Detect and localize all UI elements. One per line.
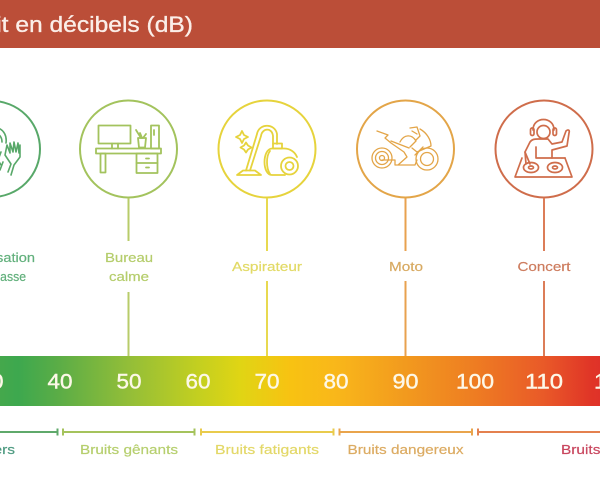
scale numbers: 70	[254, 370, 280, 394]
label: calme: calme	[109, 269, 149, 284]
decibel scale bar	[0, 356, 600, 406]
scale numbers: 110	[525, 370, 563, 394]
scale numbers: 90	[392, 370, 418, 394]
scale numbers: 50	[116, 370, 142, 394]
item: aspirateur	[218, 100, 316, 356]
label: moto: Moto	[389, 259, 423, 274]
label: concert: Concert	[518, 259, 571, 274]
icon: hand at ear	[0, 101, 40, 197]
icon: motorcycle in circle	[357, 100, 454, 198]
scale numbers	[0, 370, 600, 394]
scale numbers: 80	[324, 370, 348, 394]
scale numbers: 40	[48, 370, 72, 394]
label: bruits gênants: Bruits gênants	[80, 442, 179, 457]
connector: aspirateur	[266, 198, 268, 356]
range: bruits légers	[0, 428, 58, 457]
range: bruits douloureux	[478, 428, 600, 457]
label: bruits dangereux: Bruits dangereux	[348, 442, 464, 457]
range: bruits gênants	[63, 428, 194, 457]
connector: concert	[543, 198, 545, 356]
range: bruits dangereux	[340, 428, 472, 457]
scale numbers: 100	[456, 370, 494, 394]
label: bruits fatigants: Bruits fatigants	[215, 442, 320, 457]
scale numbers: 60	[186, 370, 210, 394]
item: concert	[496, 100, 592, 356]
label: bureau: Bureau	[105, 250, 153, 265]
item: moto	[357, 100, 454, 356]
icon: DJ in circle	[496, 100, 592, 198]
item: bureau calme	[80, 100, 177, 356]
range: bruits fatigants	[201, 428, 334, 457]
icon: vacuum cleaner in circle	[218, 100, 316, 198]
icon: desk in circle	[80, 100, 177, 198]
label: aspirateur: Aspirateur	[232, 259, 303, 274]
header banner	[0, 0, 600, 48]
connector: bureau	[128, 198, 130, 356]
item: conversation à voix basse	[0, 101, 40, 284]
connector: moto	[404, 198, 406, 356]
